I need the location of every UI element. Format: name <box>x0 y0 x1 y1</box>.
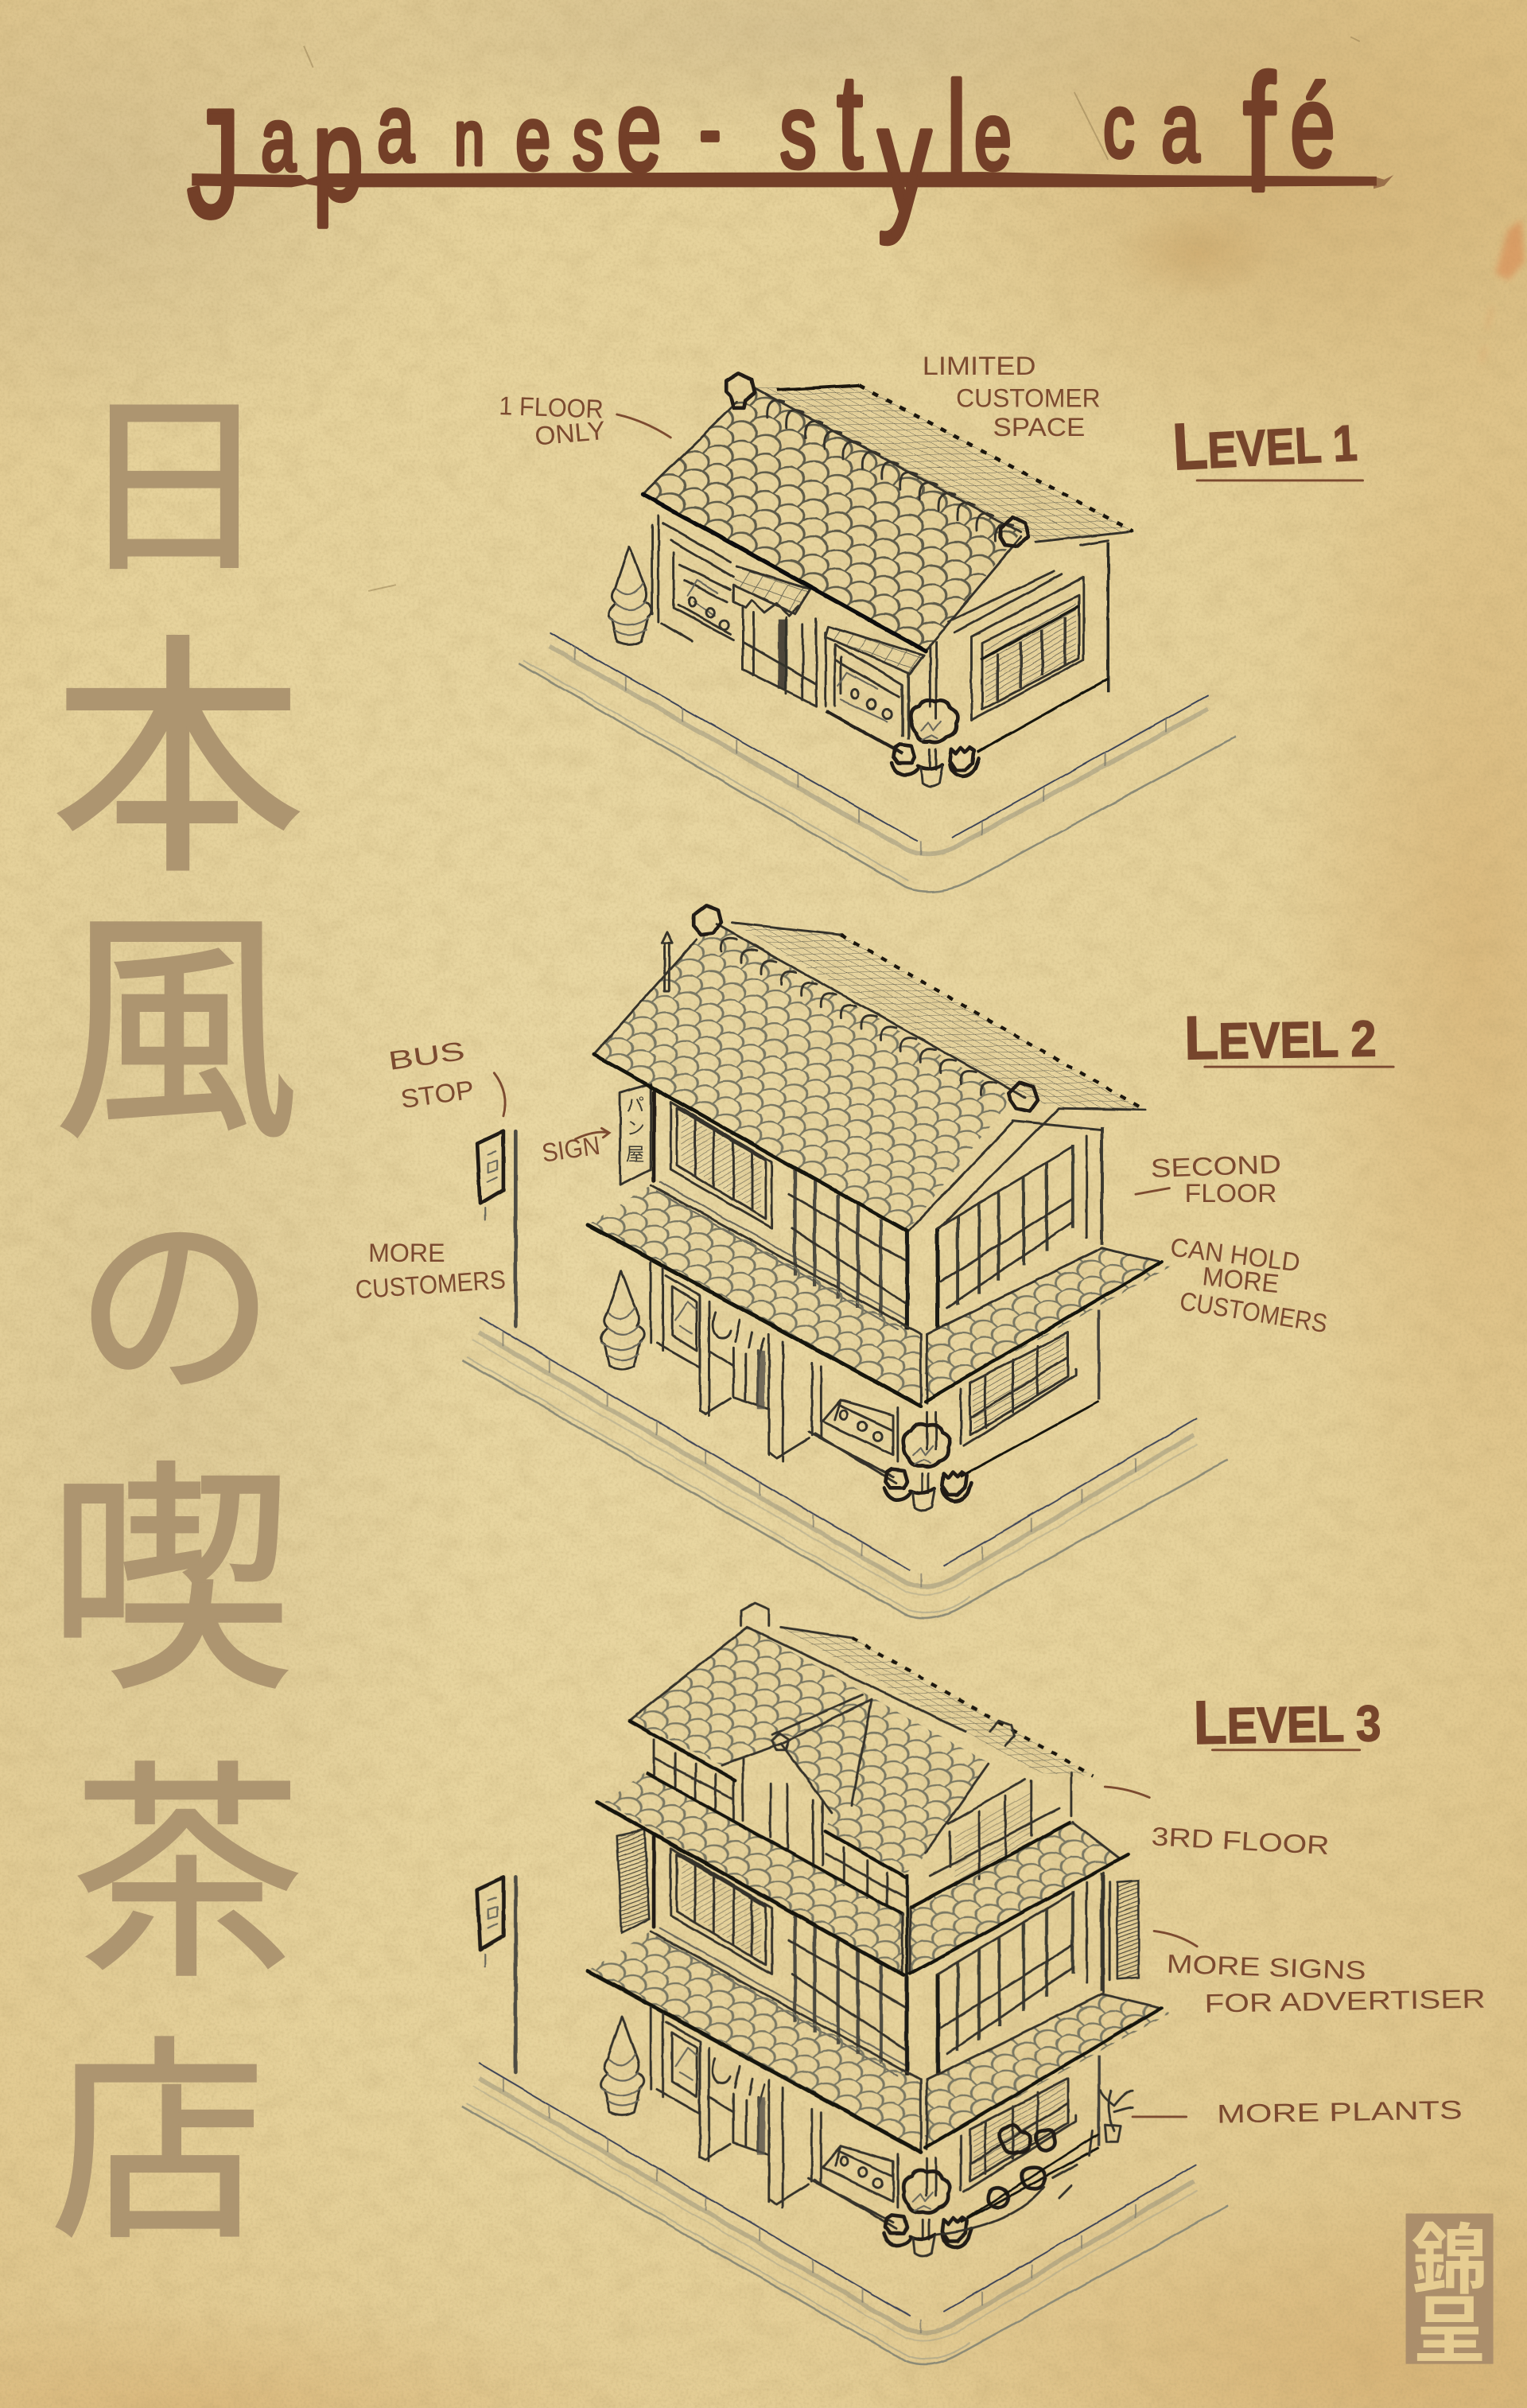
title: a <box>1161 72 1200 182</box>
note: 3rd floor <box>1105 1787 1330 1860</box>
note: second floor: SECOND <box>1150 1149 1281 1183</box>
note: 1 floor only: 1 FLOOR <box>499 391 604 424</box>
lower floors and awning roofs level 2 <box>588 1091 1171 1483</box>
potted plants level 3 <box>884 2170 971 2257</box>
sidewalk level 2 <box>462 1317 1228 1618</box>
ice cream sign level 1 <box>608 547 651 644</box>
note: more customers: MORE <box>368 1238 445 1267</box>
sidewalk level 1 <box>519 632 1235 892</box>
title: e <box>974 84 1012 189</box>
note: second floor: FLOOR <box>1185 1178 1276 1208</box>
hanging signs level 3 <box>617 1830 1139 1993</box>
bus stop level 3 <box>477 1877 515 2072</box>
note: can hold more customers: CAN HOLD <box>1169 1232 1302 1277</box>
note: bus stop: BUS <box>387 1036 467 1076</box>
title: t <box>837 47 863 196</box>
potted plants level 1 <box>892 700 979 786</box>
vertical kanji title: 本 <box>52 555 305 922</box>
note: more signs for advertiser: FOR ADVERTISER <box>1204 1984 1486 2018</box>
vertical kanji title: 茶 <box>72 1689 302 2022</box>
seal stamp <box>1406 2198 1494 2378</box>
title: l <box>946 55 966 200</box>
title: n <box>454 95 484 181</box>
heading: level 2: LEVEL 2 <box>1183 1001 1377 1072</box>
bus stop level 2 <box>477 1131 515 1326</box>
note: more customers: CUSTOMERS <box>355 1264 507 1304</box>
sign level 2: パ <box>626 1090 644 1117</box>
note: 1 floor only: ONLY <box>534 415 607 451</box>
seal stamp: 呈 <box>1412 2271 1486 2378</box>
title: p <box>313 83 363 228</box>
note: second floor <box>1136 1149 1281 1208</box>
walls level 1 <box>652 515 1108 753</box>
title: a <box>261 91 296 190</box>
title: e <box>515 90 550 189</box>
title: s <box>573 90 604 189</box>
heading: level 1: LEVEL 1 <box>1171 400 1358 484</box>
note: can hold more customers <box>1169 1232 1330 1338</box>
title: e <box>616 67 662 195</box>
note: 3rd floor: 3RD FLOOR <box>1151 1821 1330 1860</box>
tiled roof level 1 <box>643 373 1133 651</box>
note: bus stop: STOP <box>398 1075 476 1114</box>
ice cream sign level 2 <box>601 1271 644 1369</box>
ice cream sign level 3 <box>601 2017 644 2115</box>
third floor walls <box>654 1739 1071 1980</box>
vertical kanji title: の <box>76 1146 274 1435</box>
potted plants level 2 <box>884 1425 971 1511</box>
note: more signs for advertiser <box>1154 1931 1486 2018</box>
title: - <box>699 79 721 181</box>
title: J <box>187 78 241 250</box>
top roof with dormer level 3 <box>629 1603 1093 1877</box>
title: c <box>1103 77 1134 176</box>
note: more signs for advertiser: MORE SIGNS <box>1166 1949 1366 1985</box>
vertical kanji title: 風 <box>54 831 299 1187</box>
note: more customers <box>355 1238 507 1304</box>
seal stamp: 錦 <box>1411 2198 1488 2309</box>
note: sign: SIGN <box>540 1130 602 1168</box>
heading: level 3: LEVEL 3 <box>1193 1686 1381 1757</box>
sign level 2: 屋 <box>626 1139 644 1166</box>
level 1 building <box>519 373 1235 892</box>
level 3 building <box>462 1603 1228 2364</box>
title: s <box>780 72 817 189</box>
note: can hold more customers: CUSTOMERS <box>1178 1286 1330 1338</box>
tiled roof level 2 <box>594 905 1145 1231</box>
note: can hold more customers: MORE <box>1201 1261 1280 1298</box>
note: bus stop <box>387 1036 505 1116</box>
lower floors and awning roofs level 3 <box>588 1838 1171 2229</box>
vertical kanji title: 喫 <box>48 1383 293 1738</box>
note: 1 floor only <box>499 391 670 451</box>
title <box>187 41 1393 250</box>
extra plants level 3 <box>936 2091 1133 2235</box>
note: limited customer space: LIMITED <box>923 351 1036 380</box>
note: limited customer space <box>923 351 1101 442</box>
title: é <box>1290 63 1335 191</box>
vertical kanji title: 店 <box>51 1969 266 2280</box>
level 2 building <box>462 905 1228 1618</box>
sign level 2: ン <box>626 1113 644 1140</box>
note: limited customer space: SPACE <box>993 412 1085 442</box>
title: f <box>1243 41 1276 226</box>
note: limited customer space: CUSTOMER <box>956 383 1101 412</box>
sidewalk level 3 <box>462 2063 1228 2364</box>
title: y <box>878 74 931 245</box>
note: more plants: MORE PLANTS <box>1217 2095 1463 2129</box>
middle roof level 3 <box>597 1772 1128 1975</box>
vertical kanji title: 日 <box>77 333 270 610</box>
title: a <box>377 76 414 181</box>
sign level 2 <box>620 1083 651 1185</box>
